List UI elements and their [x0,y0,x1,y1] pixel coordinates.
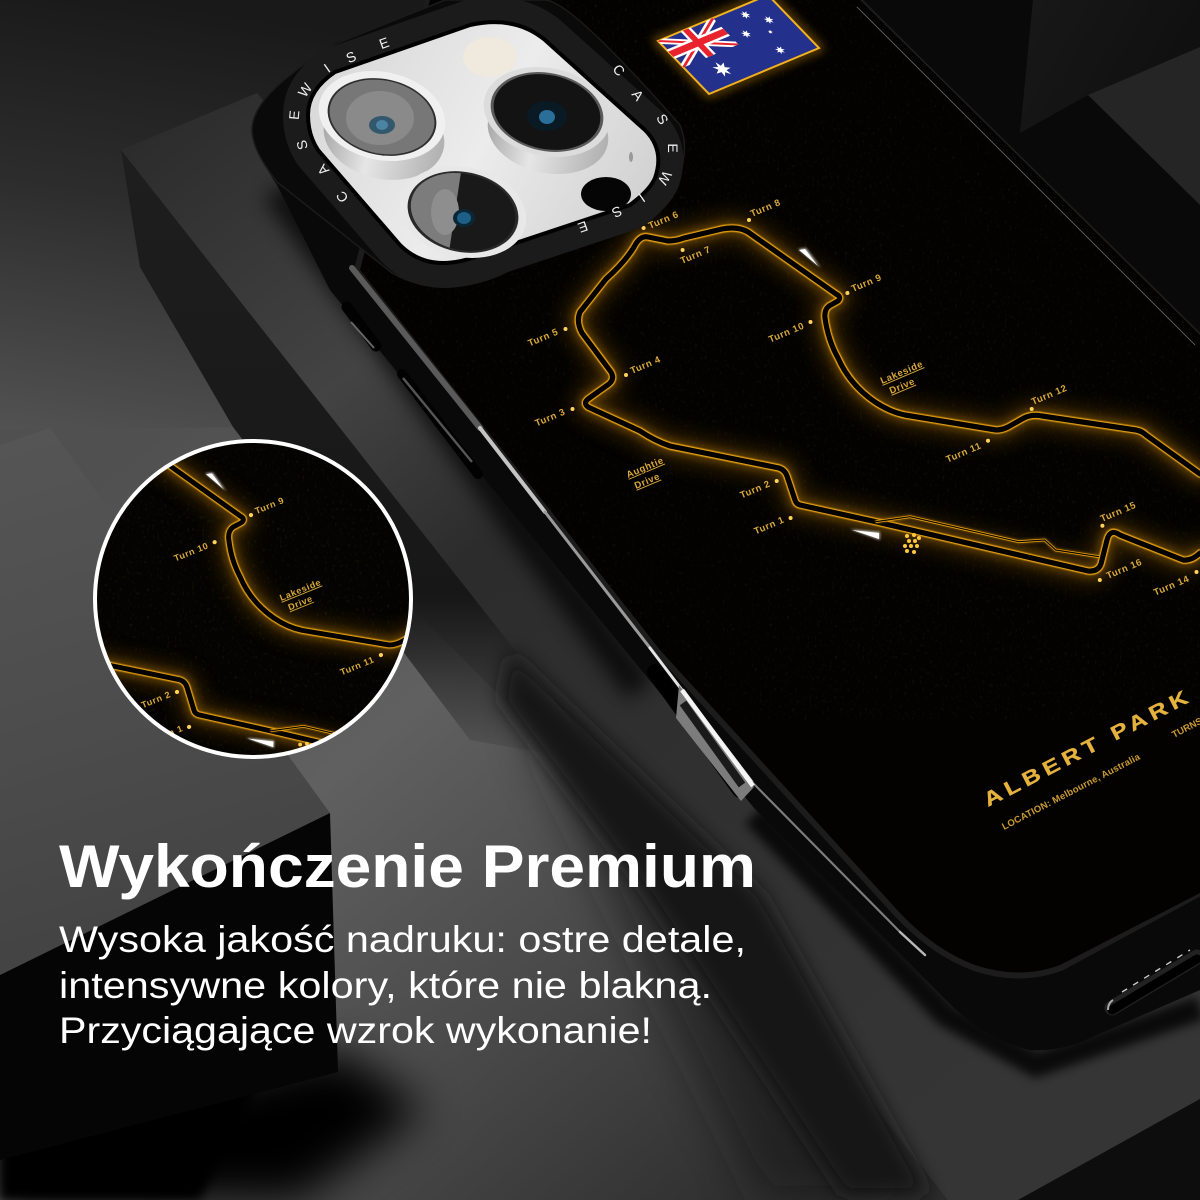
phone [253,0,1200,1050]
block: side face dark band [500,650,930,1195]
body text: intensywne kolory, które nie blakną. [59,965,712,1006]
CASEWISE ring text right: A [629,86,648,104]
block: top right backdrop [850,0,1200,400]
screen scratch texture [360,0,1200,720]
CASEWISE ring text right: W [654,168,675,188]
turn labels: Turn 2 [738,479,772,501]
CASEWISE ring text left: C [333,188,351,206]
lens 3 [408,170,524,258]
camera bumper [252,0,685,287]
shadow: phone lower side [754,815,1200,1065]
inset labels: Turn 1 [152,723,184,744]
action button [347,307,376,348]
turn labels: Turn 9 [850,272,884,295]
turn labels: Turn 3 [533,407,567,429]
turn labels [526,197,1191,599]
inset track [104,456,408,753]
edge highlights [352,7,1195,955]
turn labels: Turn 16 [1105,557,1144,582]
turn labels: Turn 12 [1030,383,1069,408]
inset: magnified track detail [93,439,413,759]
phone screen [360,0,1200,972]
heading: Wykończenie Premium [59,833,756,900]
turn labels: Aughtie [625,455,666,481]
icon: Australian flag [658,0,819,94]
shadow: phone upper side [277,190,640,690]
CASEWISE ring text left: E [377,34,391,52]
lens 2 [475,56,619,185]
block: lower left top face [0,428,330,975]
CASEWISE ring text right: I [636,190,648,206]
inset labels [138,495,382,745]
CASEWISE ring text right: C [610,61,628,79]
CASEWISE ring text left: S [343,48,359,66]
block: lower left front face [0,813,338,1160]
phone top right rim [856,0,1200,344]
flash [463,37,517,77]
circuit location: LOCATION: Melbourne, Australia [1000,751,1143,833]
turn labels: Turn 1 [752,515,786,537]
microphone [629,152,633,162]
turn labels: Turn 14 [1152,574,1191,599]
turn labels: Turn 8 [749,197,783,220]
lens 1 [310,60,454,191]
CASEWISE ring text left: E [286,110,302,120]
inset labels: Drive [287,593,314,612]
turn labels: Drive [633,471,662,492]
inset labels: Turn 10 [172,541,210,563]
turn labels: Turn 10 [767,321,806,346]
body text: Wysoka jakość nadruku: ostre detale, [59,919,746,960]
block: bottom right dark corner [1018,1099,1200,1200]
shadow: lower left block [0,1050,425,1200]
CASEWISE ring text right: E [665,143,681,153]
turn labels: Turn 11 [945,441,983,465]
circuit print: Albert Park track [526,197,1200,833]
phone body [253,0,1200,1050]
inset labels: Lakeside [278,577,323,603]
CASEWISE ring text right: S [609,203,625,221]
inset markers [174,513,388,730]
camera text ring [308,22,658,263]
body text: Przyciągające wzrok wykonanie! [59,1010,652,1051]
CASEWISE ring text left: A [313,161,332,179]
turn labels: Turn 7 [679,244,713,267]
turn markers [564,218,1198,582]
turn labels: Turn 5 [526,327,560,349]
camera module [252,0,685,287]
inset labels: Turn 11 [339,655,376,677]
inset labels: Turn 2 [140,689,172,710]
CASEWISE ring text left [286,34,391,206]
shadow: bottom left corner [0,1080,260,1200]
charging port [1108,950,1197,1010]
turn labels: Turn 4 [629,354,663,377]
inset labels: Turn 9 [253,495,286,516]
shadow: soft dark floor [520,720,900,1200]
side button [655,672,754,801]
camera window [308,22,658,263]
CASEWISE ring text right: E [576,218,590,236]
CASEWISE ring text left: W [295,79,316,100]
CASEWISE ring text right: S [653,111,672,127]
phone screen rim [360,6,1194,972]
block: phone pedestal side face [121,150,640,770]
turn labels: Lakeside [879,359,925,387]
volume button [402,374,478,474]
lidar sensor [581,177,631,211]
background: floor [0,427,1000,1200]
CASEWISE ring text right [576,61,681,236]
turn labels: Turn 6 [647,209,681,232]
CASEWISE ring text left: I [321,60,333,76]
CASEWISE ring text left: S [293,138,311,152]
track line with glow [578,228,1200,571]
turn labels: Drive [888,376,917,397]
turn labels: Turn 15 [1099,500,1138,525]
body text [59,919,746,1051]
